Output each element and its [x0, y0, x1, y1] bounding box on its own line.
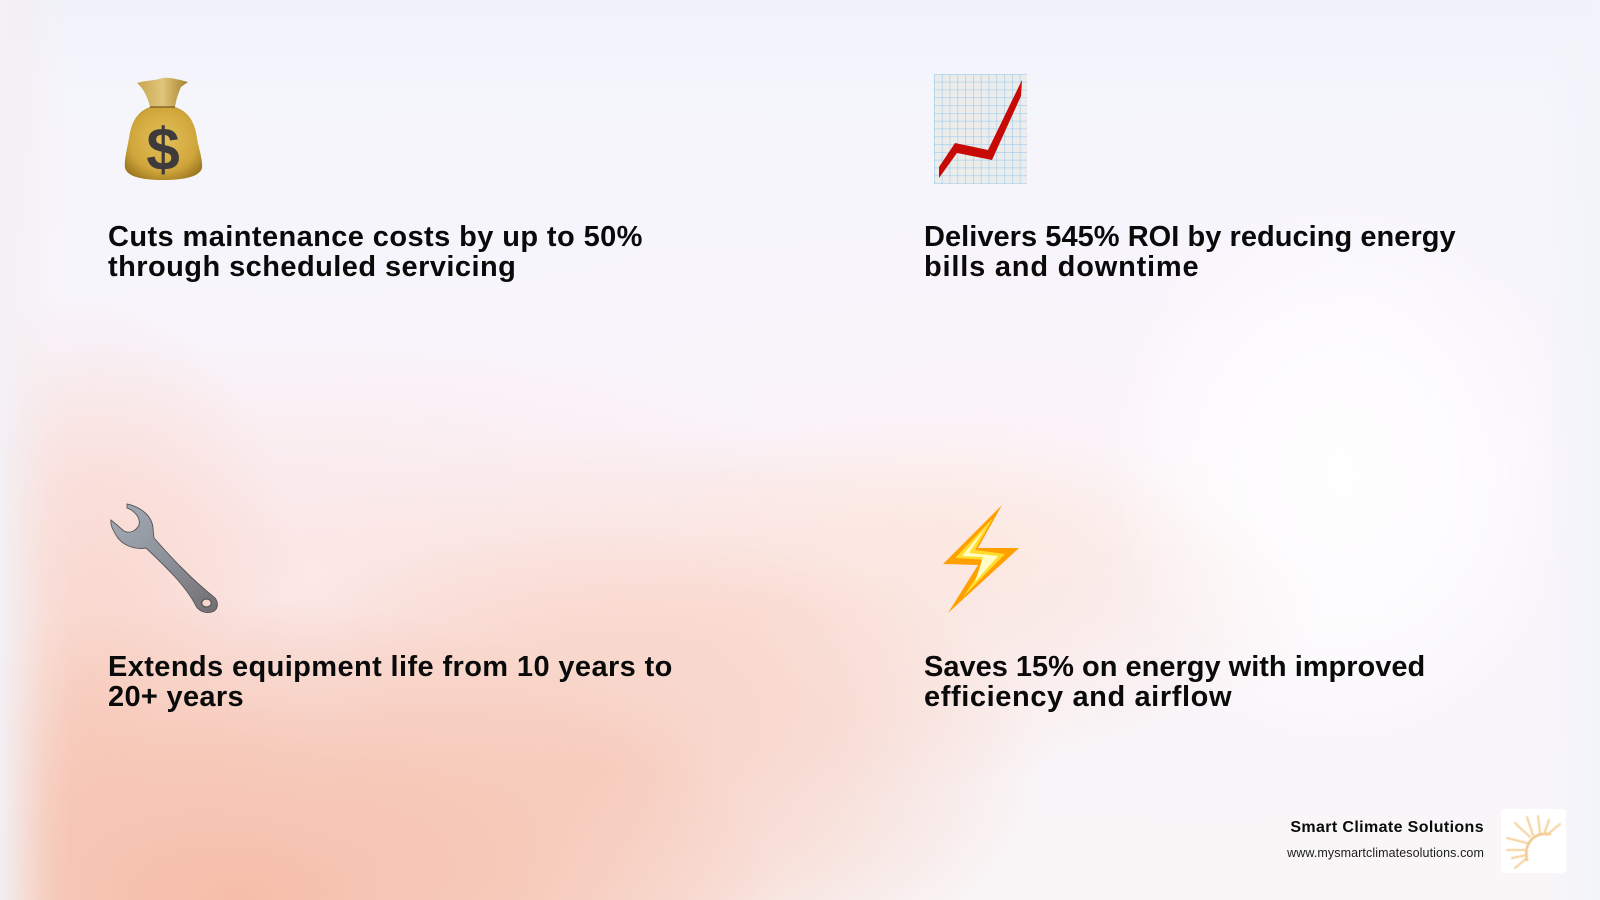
caption: return on investment: bills and downtime	[924, 251, 1199, 283]
logo sun rays	[1507, 816, 1560, 868]
logo tile	[1501, 809, 1566, 873]
caption: maintenance costs: Cuts maintenance costs by up to 50%	[108, 221, 643, 253]
caption: energy savings	[924, 651, 1425, 713]
dollar glyph on bag: $	[146, 116, 180, 183]
caption: maintenance costs: through scheduled servicing	[108, 251, 516, 283]
caption: maintenance costs	[108, 221, 643, 283]
brand website: www.mysmartclimatesolutions.com	[1287, 846, 1484, 860]
caption: energy savings: Saves 15% on energy with improved	[924, 651, 1425, 683]
caption: equipment life: Extends equipment life from 10 years to	[108, 651, 673, 683]
icon: lightning bolt	[943, 505, 1019, 613]
icon: wrench	[111, 504, 217, 613]
caption: energy savings: efficiency and airflow	[924, 681, 1232, 713]
brand name: Smart Climate Solutions	[1290, 819, 1484, 836]
logo	[1501, 809, 1566, 873]
caption: equipment life	[108, 651, 673, 713]
icon: money bag	[125, 78, 202, 183]
caption: return on investment	[924, 221, 1456, 283]
caption: return on investment: Delivers 545% ROI by reducing energy	[924, 221, 1456, 253]
caption: equipment life: 20+ years	[108, 681, 244, 713]
icon: chart with upward trend	[934, 74, 1027, 184]
